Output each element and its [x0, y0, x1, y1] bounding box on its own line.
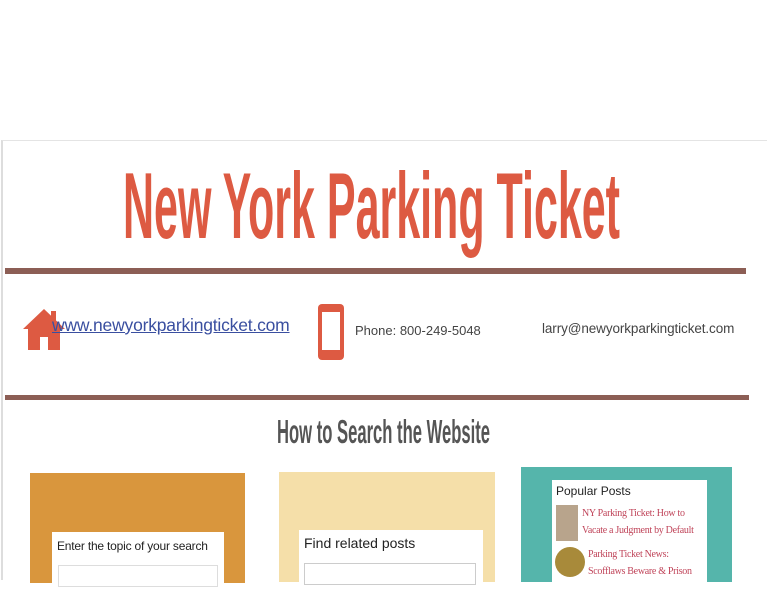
- phone text: Phone: 800-249-5048: [355, 323, 481, 338]
- website link: www.newyorkparkingticket.com: [52, 315, 290, 335]
- icon: house: [23, 309, 65, 350]
- panel: popular posts: Parking Ticket News:: [588, 549, 669, 560]
- panel: popular posts: NY Parking Ticket: How to: [582, 508, 685, 519]
- panel: popular posts: [521, 467, 732, 582]
- contact row: [23, 304, 734, 360]
- panel: search: [30, 473, 245, 583]
- icon: phone: [318, 304, 344, 360]
- panel: popular posts: Scofflaws Beware & Prison: [588, 566, 692, 577]
- heading: How to Search the Website: [277, 413, 490, 450]
- email: larry@newyorkparkingticket.com: [542, 321, 734, 336]
- panel: popular posts: Vacate a Judgment by Default: [582, 525, 694, 536]
- panel: related posts: Find related posts: [304, 535, 415, 551]
- slide frame: [1, 140, 767, 580]
- panel: related posts: [279, 472, 495, 582]
- panel: search: Enter the topic of your search: [57, 539, 208, 553]
- panel: popular posts: Popular Posts: [556, 484, 631, 498]
